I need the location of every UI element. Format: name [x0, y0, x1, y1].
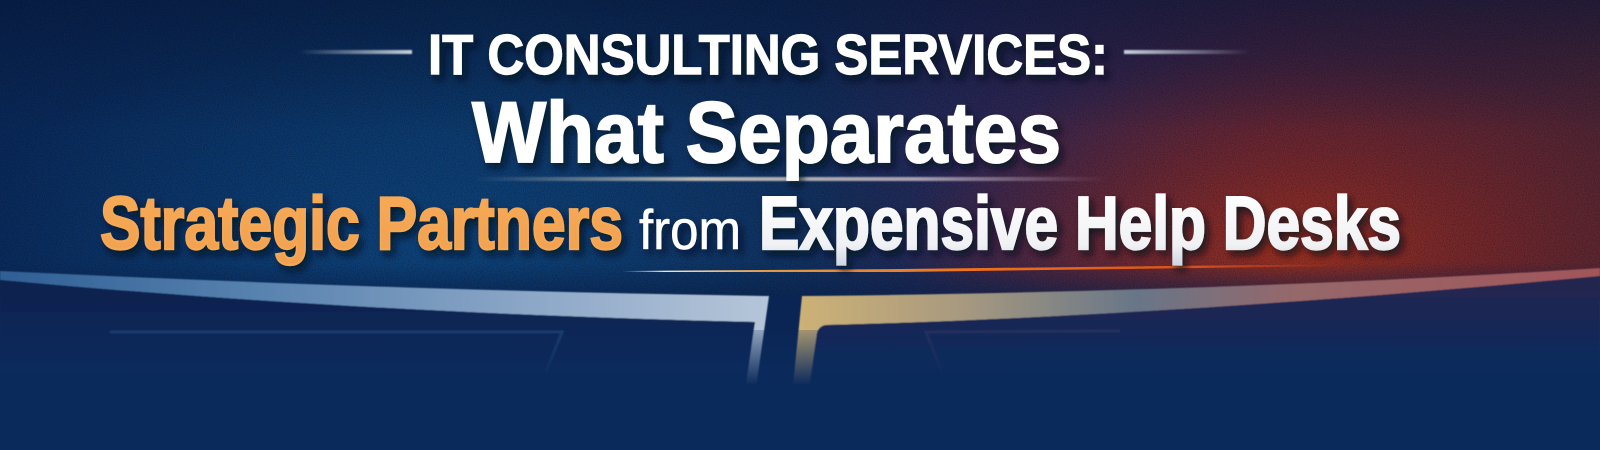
rule left of heading	[298, 50, 412, 54]
heading line 3	[100, 181, 1401, 265]
heading line 2: What Separates	[472, 85, 1061, 181]
right panel frame	[792, 268, 1600, 400]
centre gap between panels	[745, 296, 820, 400]
bottom fade	[0, 330, 1600, 450]
heading line 1: IT CONSULTING SERVICES:	[428, 23, 1108, 87]
right inner panel outline	[926, 331, 1120, 372]
strategic partners: Strategic Partners	[100, 181, 623, 265]
rule under heading line 2	[475, 177, 1107, 181]
orange accent rule	[622, 264, 1345, 272]
left panel frame	[0, 271, 769, 400]
left inner panel outline	[110, 332, 562, 372]
expensive help desks: Expensive Help Desks	[759, 181, 1401, 265]
rule right of heading	[1124, 50, 1250, 54]
from: from	[639, 198, 741, 261]
